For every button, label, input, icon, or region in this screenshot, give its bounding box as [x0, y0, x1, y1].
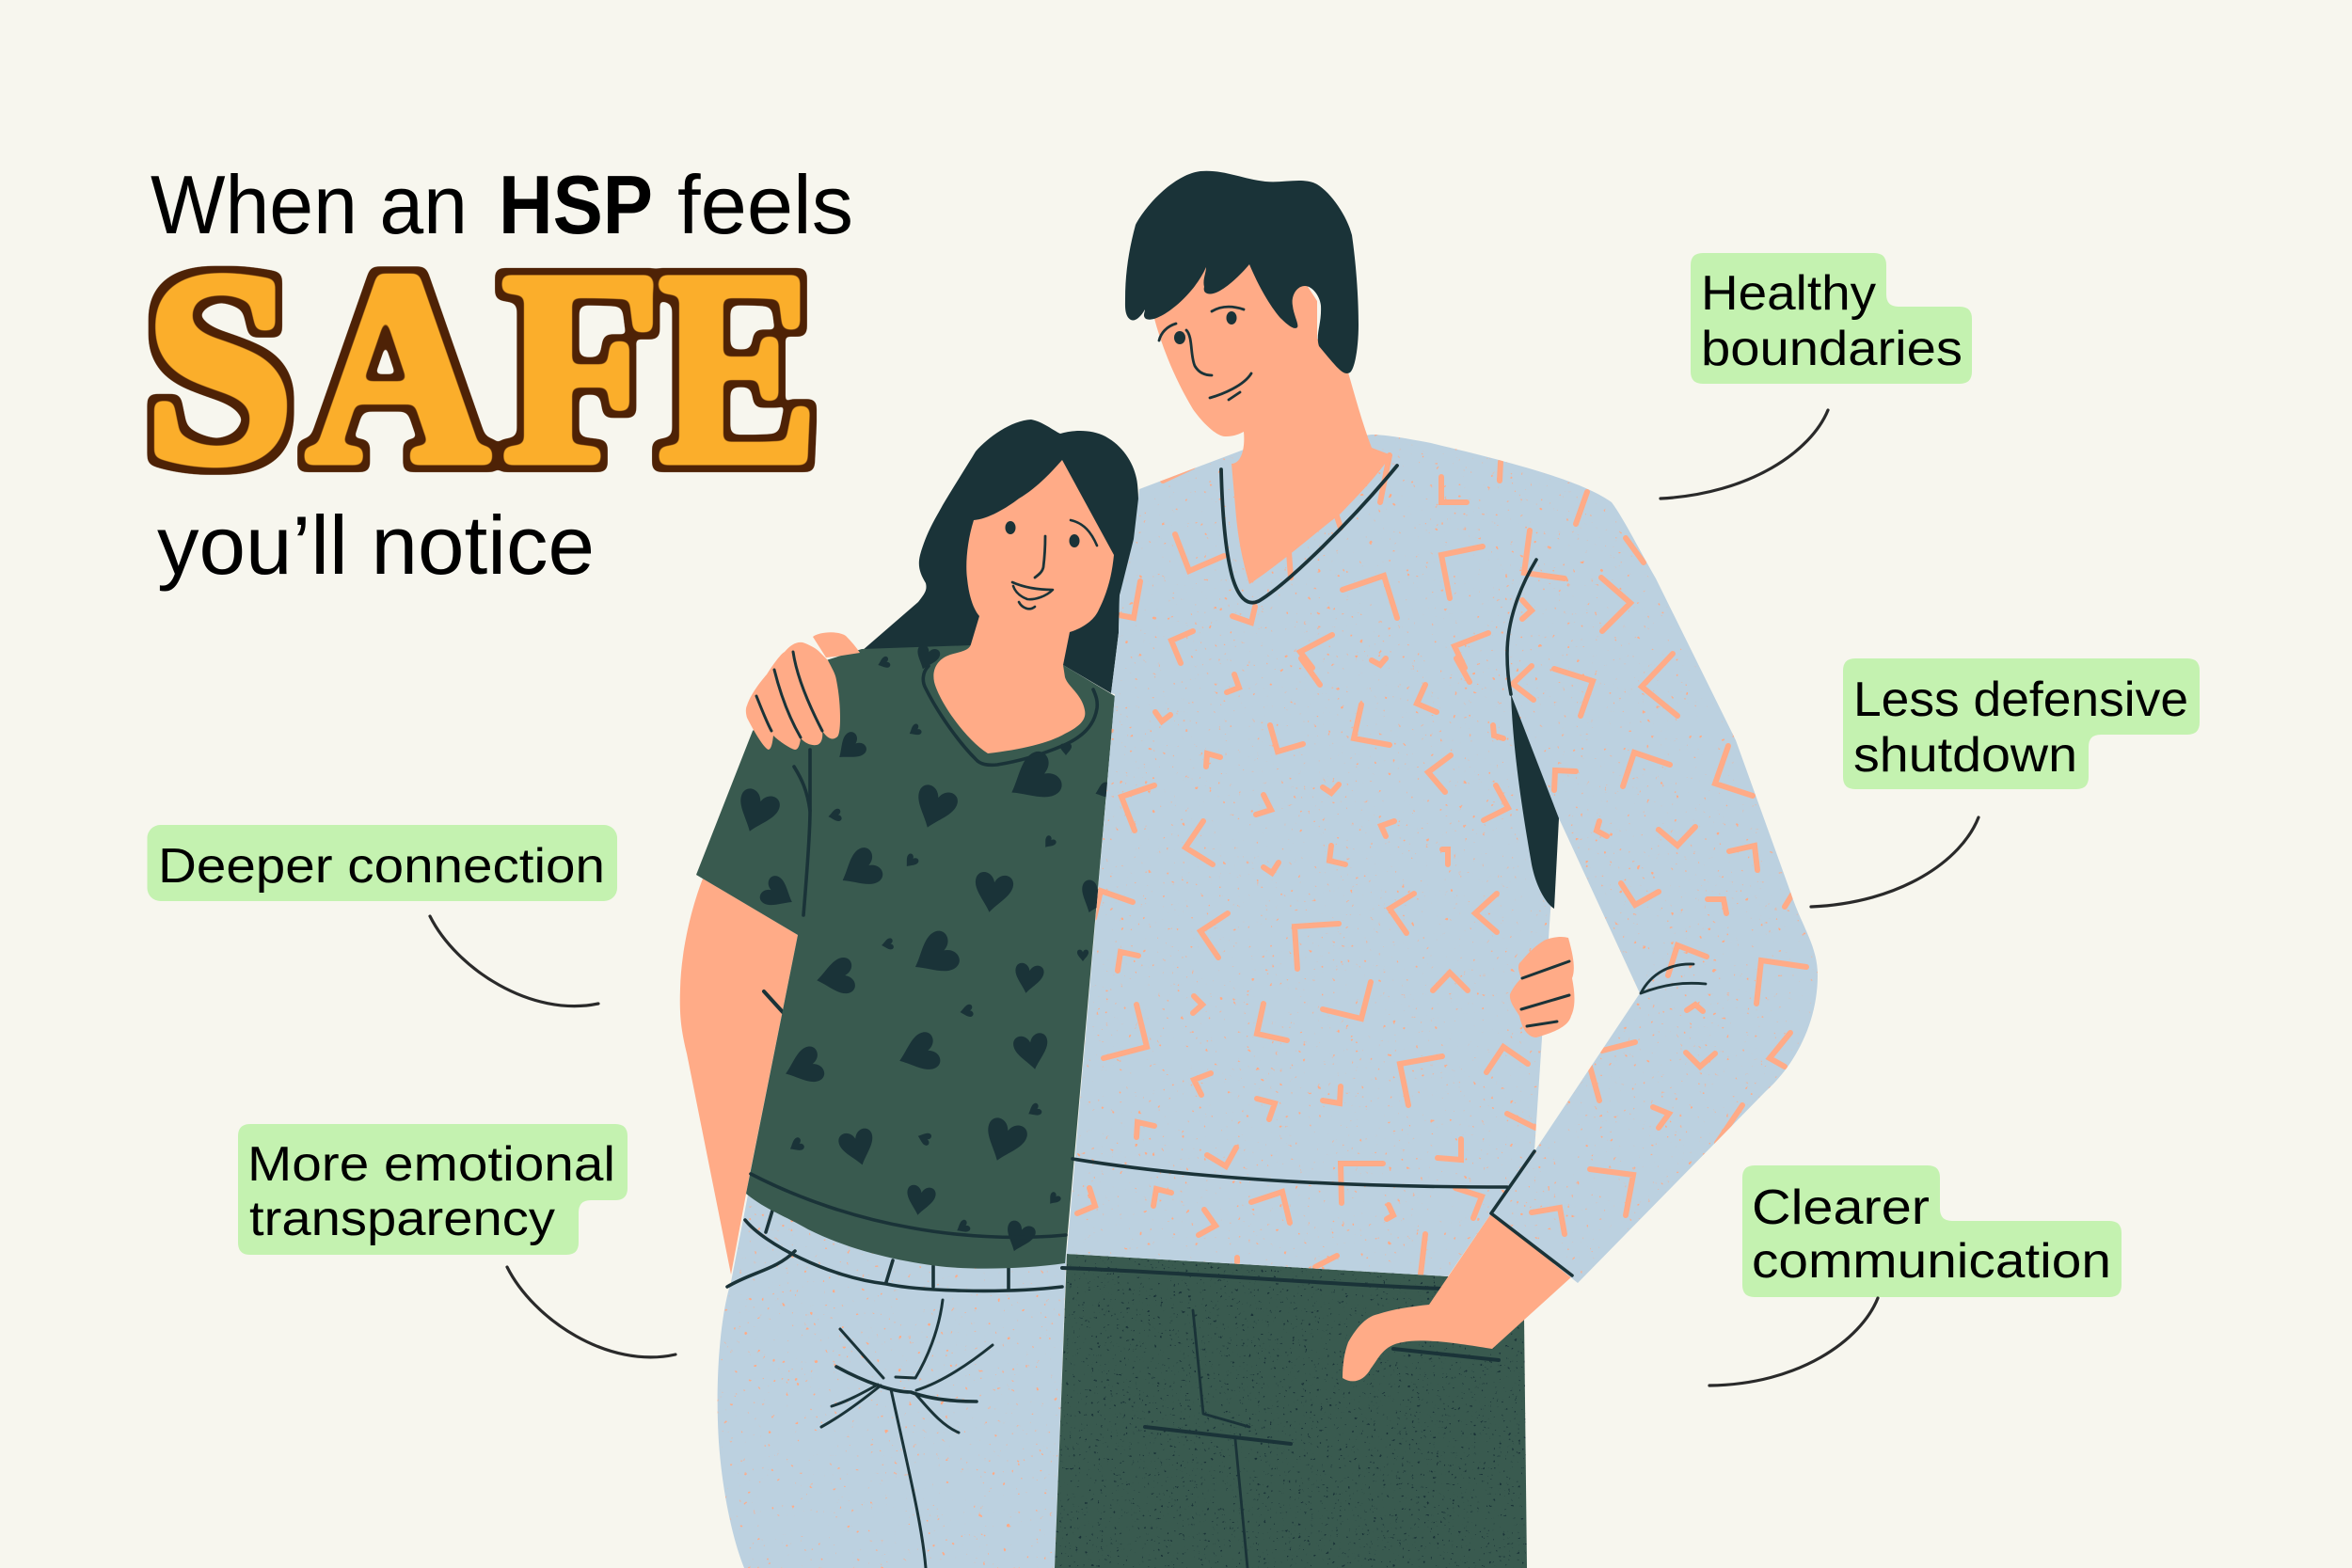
man: hair [1125, 171, 1359, 373]
title: you'll notice: you’ll notice [157, 499, 595, 592]
label: Healthy boundaries: Healthy [1701, 266, 1876, 321]
man: green trousers [1055, 1254, 1527, 1568]
man: gap between arm and torso [1534, 818, 1640, 1151]
label: Less defensive shutdown [1843, 658, 2200, 789]
title: SAFE [144, 214, 818, 521]
label: Clearer communication [1742, 1165, 2122, 1297]
man: hand on woman's shoulder [746, 642, 840, 750]
label: More emotional transparency [238, 1124, 628, 1255]
woman: jeans speckle [717, 1206, 1065, 1568]
woman: t-shirt hearts [731, 643, 1114, 1256]
man: neck and face [1153, 259, 1391, 584]
title: SAFE: E [659, 214, 818, 521]
woman: facial features [1005, 520, 1097, 609]
label: Healthy boundaries: boundaries [1701, 322, 1963, 376]
label: Less defensive shutdown: Less defensive [1853, 673, 2188, 727]
label: Deeper connection [147, 825, 617, 901]
connector: Healthy boundaries [1661, 410, 1828, 499]
woman: face and neck [933, 460, 1114, 753]
woman: hand on man's waist [1510, 937, 1575, 1037]
man: trousers speckle [1044, 1246, 1534, 1568]
title: SAFE: A [306, 214, 490, 521]
connector: Less defensive shutdown [1811, 817, 1979, 907]
label: Clearer communication: Clearer [1752, 1180, 1930, 1235]
label: Less defensive shutdown: shutdown [1853, 728, 2077, 783]
title: When an HSP feels: When an [151, 158, 468, 251]
label: More emotional transparency: More emotional [247, 1137, 615, 1192]
woman: hair [862, 420, 1138, 693]
label: Healthy boundaries [1691, 253, 1972, 384]
man: sweater lines [1073, 466, 1706, 1275]
woman: jeans seams [727, 1211, 1062, 1568]
man: forearm and hand in pocket [1343, 1213, 1572, 1381]
label: More emotional transparency: transparency [249, 1192, 555, 1246]
title: When an HSP feels: feels [677, 158, 853, 251]
woman: green t-shirt [696, 645, 1115, 1269]
man: dark armpit shadow [1511, 694, 1559, 909]
woman: collar line [923, 666, 1097, 765]
connector: Deeper connection [430, 916, 598, 1006]
title: SAFE: S [144, 214, 294, 521]
connector: Clearer communication [1709, 1298, 1878, 1386]
man: hand thumb behind shoulder [813, 632, 860, 657]
title: When an HSP feels [151, 158, 853, 251]
man: sweater chevron pattern and speckle [1054, 423, 1835, 1289]
woman: arm crease [764, 991, 783, 1012]
label: Deeper connection: Deeper connection [158, 839, 605, 894]
man: blue sweater [1067, 435, 1818, 1283]
woman: t-shirt seams [751, 750, 1066, 1237]
title: When an HSP feels: HSP [499, 158, 653, 251]
label: Clearer communication: communication [1752, 1234, 2111, 1289]
woman: back arm [680, 879, 798, 1275]
title: SAFE: F [501, 214, 661, 521]
man: facial features [1159, 307, 1251, 400]
man: trouser seams [1062, 1268, 1499, 1568]
connector: More emotional transparency [507, 1267, 675, 1357]
woman: jeans [718, 1190, 1067, 1568]
